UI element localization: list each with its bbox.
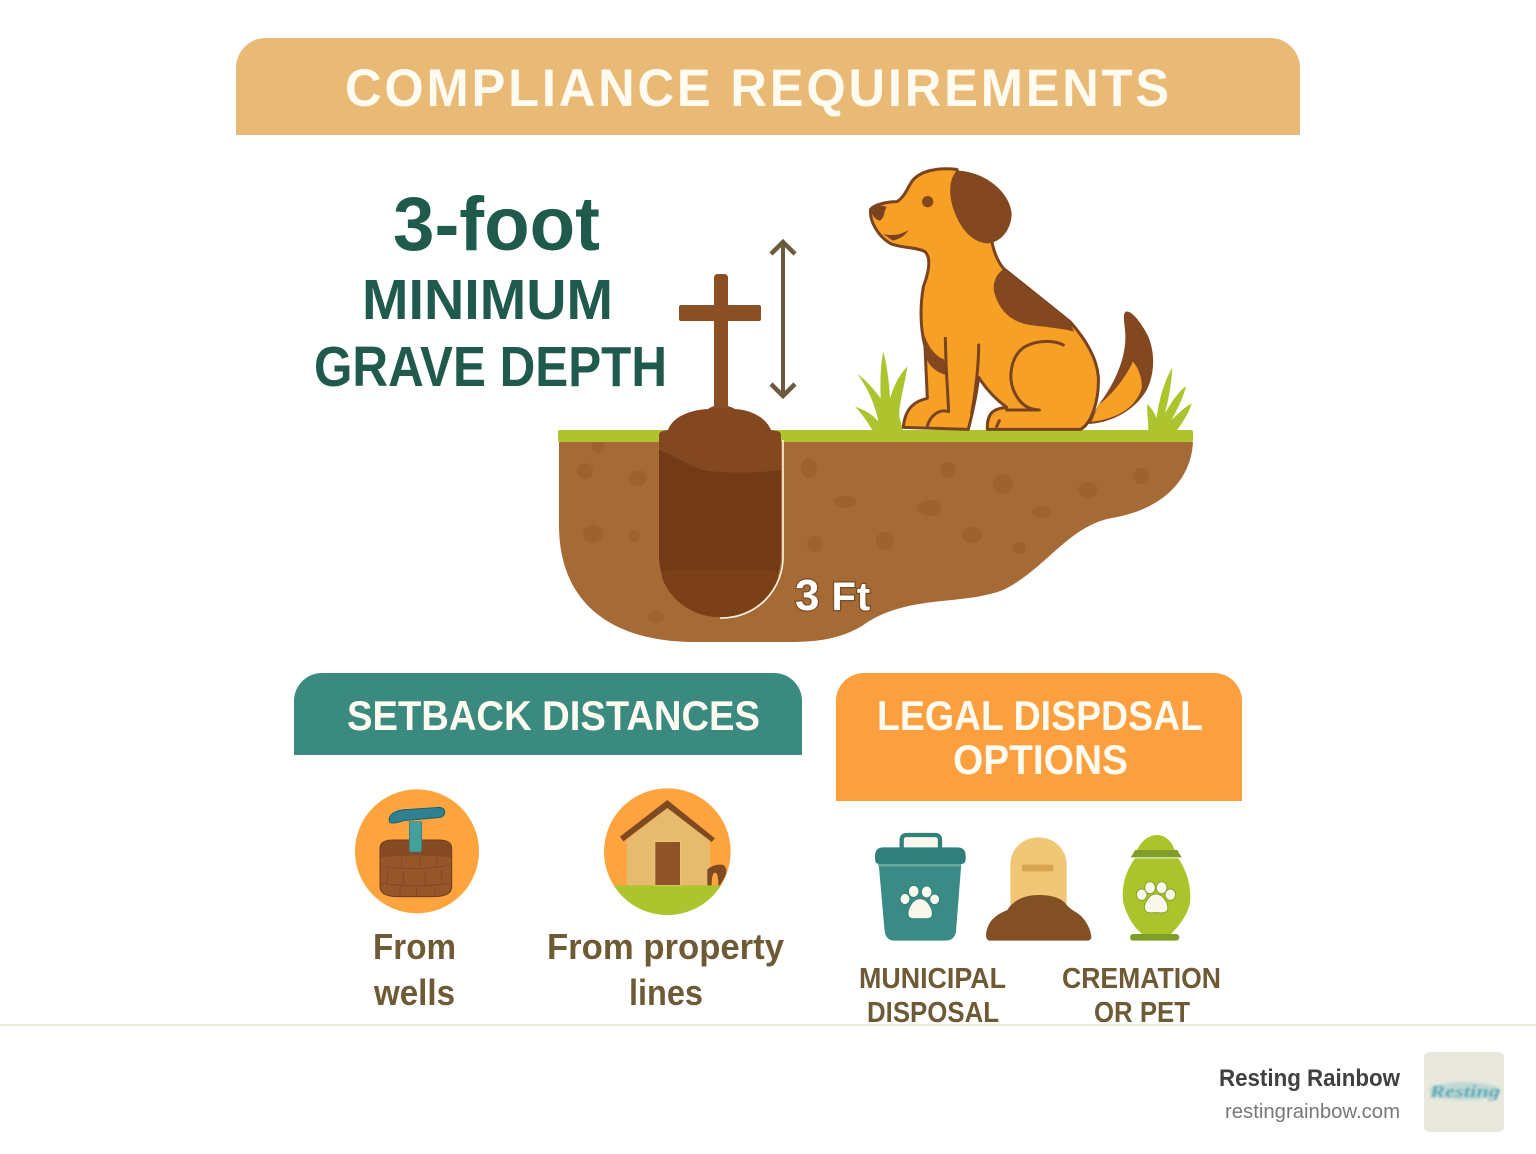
title: COMPLIANCE REQUIREMENTS (345, 59, 1172, 118)
footer brand: Resting Rainbow (1219, 1065, 1400, 1092)
body (871, 169, 1098, 429)
icon: trash bin (875, 835, 966, 941)
walls (627, 807, 710, 885)
text block: minimum grave depth: MINIMUM (362, 268, 613, 332)
grass strip (558, 430, 1193, 442)
caption: from wells (373, 926, 456, 1013)
text block: minimum grave depth (314, 182, 667, 399)
icon: headstone on mound (986, 837, 1091, 941)
door (655, 842, 680, 885)
footer brand (1219, 1065, 1400, 1123)
soil mound (659, 405, 781, 473)
label: 3 ft: 3 Ft (795, 571, 870, 620)
footer logo (1424, 1052, 1504, 1132)
paw (1136, 882, 1176, 913)
depth arrow (771, 242, 795, 396)
banner: legal disposal options (836, 673, 1242, 801)
dark patches (950, 171, 1012, 243)
paw (900, 885, 940, 919)
header: compliance requirements (236, 38, 1300, 135)
footer brand: restingrainbow.com (1225, 1101, 1400, 1123)
caption: cremation or pet: OR PET (1094, 997, 1190, 1029)
illustration: ground cross-section with grave (558, 242, 1193, 642)
nose (871, 206, 887, 221)
fence (707, 865, 726, 885)
well base (380, 840, 452, 897)
banner: legal disposal options: LEGAL DISPDSAL (877, 692, 1203, 739)
illustration: sitting dog and grass (855, 169, 1192, 432)
grass left (855, 352, 907, 432)
icon: well (355, 789, 479, 913)
caption: from property lines (547, 926, 784, 1013)
caption: from property lines: From property (547, 926, 784, 967)
text block: minimum grave depth: 3-foot (393, 182, 600, 267)
soil speckles (577, 441, 1149, 623)
banner: setback distances (294, 673, 802, 755)
icon: house (604, 788, 731, 915)
banner: setback distances: SETBACK DISTANCES (347, 692, 760, 739)
caption: municipal disposal: MUNICIPAL (859, 963, 1006, 995)
well pump (389, 807, 445, 852)
grass right (1147, 367, 1192, 431)
eye (922, 196, 933, 207)
leg and haunch lines (927, 338, 1063, 427)
cross (679, 274, 761, 408)
icon: urn (1123, 835, 1190, 941)
banner: legal disposal options: OPTIONS (953, 736, 1128, 783)
footer logo: Resting (1429, 1082, 1501, 1101)
caption: from property lines: lines (629, 972, 703, 1013)
soil (559, 442, 1193, 642)
caption: cremation or pet (1062, 963, 1221, 1029)
mouth (883, 230, 909, 241)
caption: from wells: From (373, 926, 456, 967)
caption: municipal disposal: DISPOSAL (867, 997, 999, 1029)
text block: minimum grave depth: GRAVE DEPTH (314, 335, 667, 399)
lawn (614, 885, 721, 915)
caption: municipal disposal (859, 963, 1006, 1029)
roof (620, 800, 715, 842)
caption: from wells: wells (373, 972, 455, 1013)
tail (1088, 312, 1153, 424)
caption: cremation or pet: CREMATION (1062, 963, 1221, 995)
grave shaft (659, 431, 783, 618)
